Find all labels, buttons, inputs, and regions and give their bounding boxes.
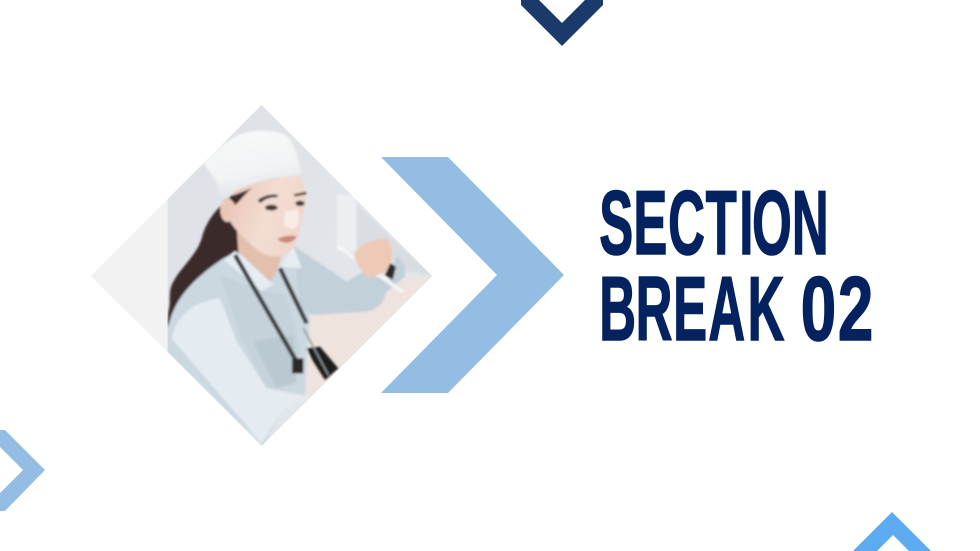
icon: bottom-right blue chevron (853, 512, 931, 551)
title line: BREAK 02 (599, 257, 873, 360)
pen (337, 246, 403, 292)
shirt: left arm highlight (172, 298, 310, 443)
icon: left light-blue chevron (0, 430, 45, 511)
grey diamond backing (91, 105, 262, 352)
title line: SECTION: SECTION (599, 171, 829, 274)
eyes and brows (257, 195, 278, 203)
shirt: right sleeve (293, 245, 405, 315)
neck (237, 225, 283, 282)
photo: doctor illustration (167, 105, 434, 448)
title line: BREAK 02: 02 (801, 258, 873, 360)
desk-side dark object (307, 347, 338, 380)
title line: BREAK 02: BREAK (599, 257, 784, 360)
title (599, 171, 873, 360)
hand (354, 238, 392, 278)
hair (167, 192, 240, 328)
shirt: body (167, 245, 310, 446)
lips (277, 236, 297, 243)
icon: top navy chevron (521, 0, 603, 46)
collar (224, 246, 302, 291)
hairline (230, 188, 252, 205)
arrow: large light-blue chevron (381, 157, 564, 393)
ear (220, 198, 234, 222)
panel: diamond photo of doctor (91, 105, 434, 448)
stethoscope tubes (235, 255, 307, 373)
cuff (385, 263, 396, 280)
hat (204, 131, 302, 199)
face (230, 176, 305, 257)
